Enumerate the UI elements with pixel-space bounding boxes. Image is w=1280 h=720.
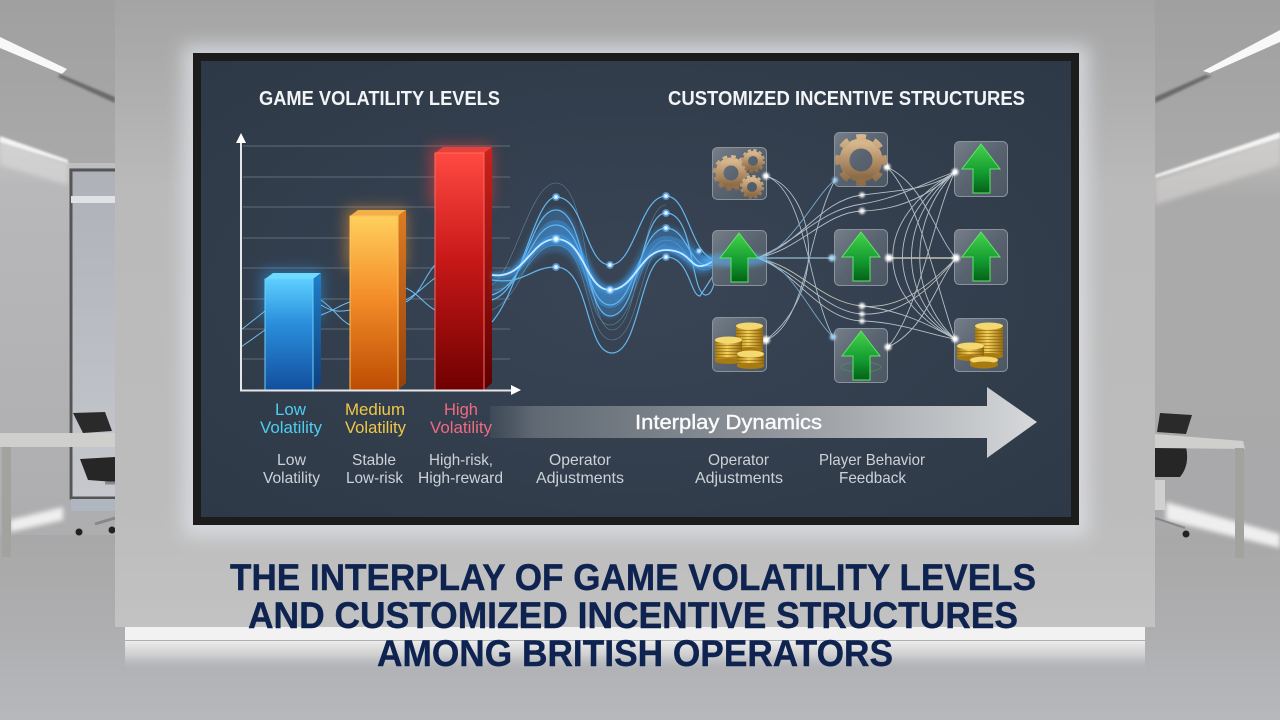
wave glow band xyxy=(492,208,722,318)
connector nodes xyxy=(762,164,960,350)
icon: gears cluster xyxy=(715,150,764,198)
category label: high volatility: Volatility xyxy=(430,418,492,437)
main wall xyxy=(115,0,1155,627)
icon: coins, left column xyxy=(715,322,764,369)
caption: high-risk high-reward: High-risk, xyxy=(429,452,493,469)
incentive network xyxy=(701,132,1008,383)
bar glows xyxy=(262,145,492,320)
heading: game volatility levels: GAME VOLATILITY LEVELS xyxy=(259,88,500,110)
main title: AMONG BRITISH OPERATORS xyxy=(377,633,893,674)
category label: medium volatility: Medium xyxy=(345,400,405,419)
source glow xyxy=(701,253,769,267)
caption: operator adjustments 1: Adjustments xyxy=(536,470,624,487)
left doorway xyxy=(69,168,115,511)
left chair xyxy=(73,412,116,536)
bar chart xyxy=(236,133,521,395)
right floor glow xyxy=(1166,502,1280,548)
icon: large gear xyxy=(838,137,884,183)
wave flow xyxy=(492,183,722,353)
left floor glow xyxy=(10,507,63,532)
icon tiles xyxy=(713,132,1008,383)
bar: medium volatility xyxy=(350,210,406,390)
heading: customized incentive structures: CUSTOMIZED INCENTIVE STRUCTURES xyxy=(668,88,1025,110)
caption: low volatility: Volatility xyxy=(263,470,320,487)
category label: high volatility: High xyxy=(444,400,478,419)
icon: green arrow, right column top xyxy=(962,144,1000,193)
main title: AND CUSTOMIZED INCENTIVE STRUCTURES xyxy=(248,595,1018,636)
icon: coins, right column xyxy=(957,322,1003,368)
y axis xyxy=(236,133,246,391)
category label: low volatility: Low xyxy=(275,400,307,419)
x axis xyxy=(240,385,521,395)
caption: operator adjustments 1: Operator xyxy=(549,452,612,469)
left ceiling beam xyxy=(58,74,115,103)
screen surface xyxy=(201,61,1071,517)
wave nodes xyxy=(553,194,701,293)
main title xyxy=(230,557,1036,674)
right ceiling beam xyxy=(1155,75,1212,103)
screen bezel xyxy=(193,53,1079,525)
right desk xyxy=(1155,434,1245,558)
left ceiling light strip xyxy=(0,37,67,74)
caption: operator adjustments 2: Operator xyxy=(708,452,770,469)
icon: green arrow, left column xyxy=(720,233,758,282)
wave band fill xyxy=(492,220,722,308)
wave segments behind bars xyxy=(241,265,435,347)
category label: medium volatility: Volatility xyxy=(345,418,406,437)
caption: high-risk high-reward: High-reward xyxy=(418,470,503,487)
main title: THE INTERPLAY OF GAME VOLATILITY LEVELS xyxy=(230,557,1036,598)
arrow label: Interplay Dynamics xyxy=(635,412,822,434)
right ceiling light strip xyxy=(1203,30,1280,73)
wave strands xyxy=(492,196,722,353)
caption: player behavior feedback: Feedback xyxy=(839,470,907,487)
caption: player behavior feedback: Player Behavior xyxy=(819,452,926,469)
icon: green arrow, middle column centre xyxy=(842,232,880,281)
icon: green arrow, right column centre xyxy=(962,232,1000,281)
right chair xyxy=(1155,413,1192,538)
bar: high volatility xyxy=(435,147,492,390)
icon: green arrow, middle column bottom xyxy=(842,331,880,380)
connector lines xyxy=(757,167,956,347)
display screen xyxy=(193,53,1079,525)
category label: low volatility: Volatility xyxy=(260,418,322,437)
bar: low volatility xyxy=(265,273,321,390)
caption: stable low-risk: Low-risk xyxy=(346,470,404,487)
wall base light xyxy=(125,627,1145,669)
wave main bright strand xyxy=(492,239,722,290)
right cove light xyxy=(1155,132,1280,205)
left cove light xyxy=(0,136,68,185)
caption: operator adjustments 2: Adjustments xyxy=(695,470,783,487)
left desk xyxy=(0,433,115,557)
caption: stable low-risk: Stable xyxy=(352,452,396,469)
caption: low volatility: Low xyxy=(277,452,306,469)
icon: swirl under arrow xyxy=(841,362,881,372)
interplay dynamics arrow xyxy=(490,387,1037,458)
